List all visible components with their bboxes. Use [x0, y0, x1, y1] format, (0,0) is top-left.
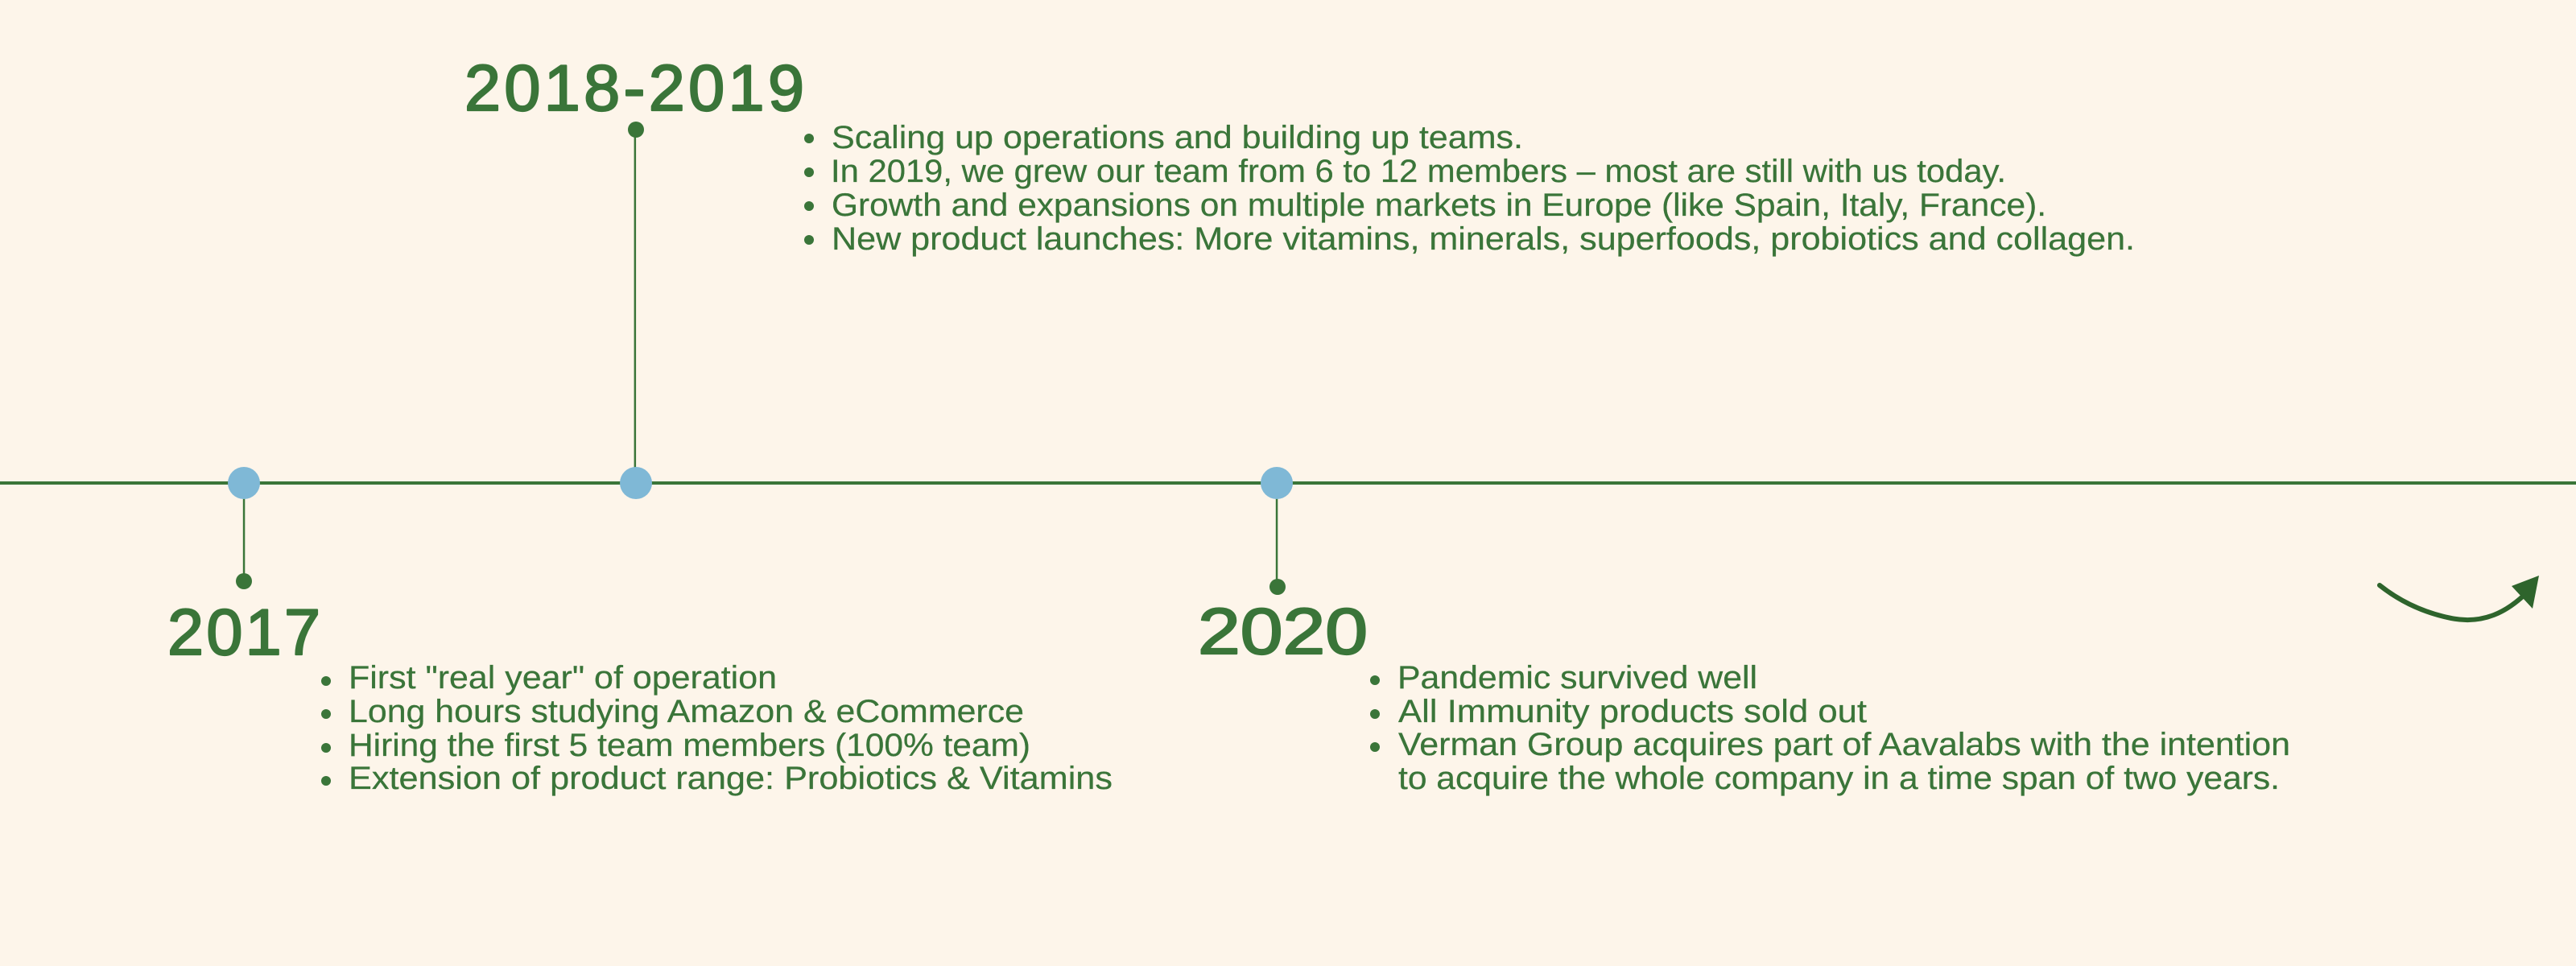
text block: 2020 bullets — [1370, 660, 2290, 796]
text block: 2020 bullets: to acquire the whole company in a time span of two years. — [1398, 761, 2280, 796]
marker: 2020 end dot — [1269, 579, 1286, 595]
text block: 2017 bullets: Hiring the first 5 team members (100% team) — [349, 728, 1030, 763]
heading: 2017: 2017 — [167, 597, 320, 669]
marker: 2018-2019 axis node — [620, 467, 652, 499]
text block: 2018-2019 bullets: Scaling up operations and building up teams. — [832, 120, 1523, 155]
heading: 2020: 2020 — [1198, 596, 1368, 668]
text block: 2020 bullets: Verman Group acquires part of Aavalabs with the intention — [1398, 727, 2290, 762]
marker: 2017 end dot — [236, 573, 252, 589]
horizontal timeline axis — [0, 481, 2576, 485]
connector stem 2018-2019 — [634, 130, 636, 476]
text block: 2018-2019 bullets — [804, 120, 2135, 257]
connector stem 2020 — [1276, 491, 1278, 587]
text block: 2018-2019 bullets: New product launches: More vitamins, minerals, superfoods, probiotics and collagen. — [832, 221, 2135, 257]
text block: 2020 bullets: All Immunity products sold out — [1398, 694, 1867, 729]
marker: 2017 axis node — [228, 467, 260, 499]
panel: 2018-2019 milestone — [464, 52, 2135, 499]
marker: 2018-2019 end dot — [628, 122, 644, 138]
text block: 2017 bullets — [321, 660, 1113, 796]
text block: 2017 bullets: First "real year" of operation — [349, 660, 777, 696]
marker: 2020 axis node — [1261, 467, 1293, 499]
heading: 2018-2019: 2018-2019 — [464, 52, 804, 125]
text block: 2018-2019 bullets: In 2019, we grew our team from 6 to 12 members – most are still with us today. — [831, 154, 2006, 189]
text block: 2020 bullets: Pandemic survived well — [1397, 660, 1757, 696]
text block: 2018-2019 bullets: Growth and expansions on multiple markets in Europe (like Spain, Italy, France). — [832, 188, 2046, 223]
panel: 2017 milestone — [167, 467, 1113, 796]
connector stem 2017 — [243, 491, 245, 581]
text block: 2017 bullets: Extension of product range: Probiotics & Vitamins — [349, 761, 1113, 796]
icon: curved arrow — [2380, 576, 2539, 620]
panel: 2020 milestone — [1198, 467, 2290, 796]
text block: 2017 bullets: Long hours studying Amazon & eCommerce — [349, 694, 1024, 729]
